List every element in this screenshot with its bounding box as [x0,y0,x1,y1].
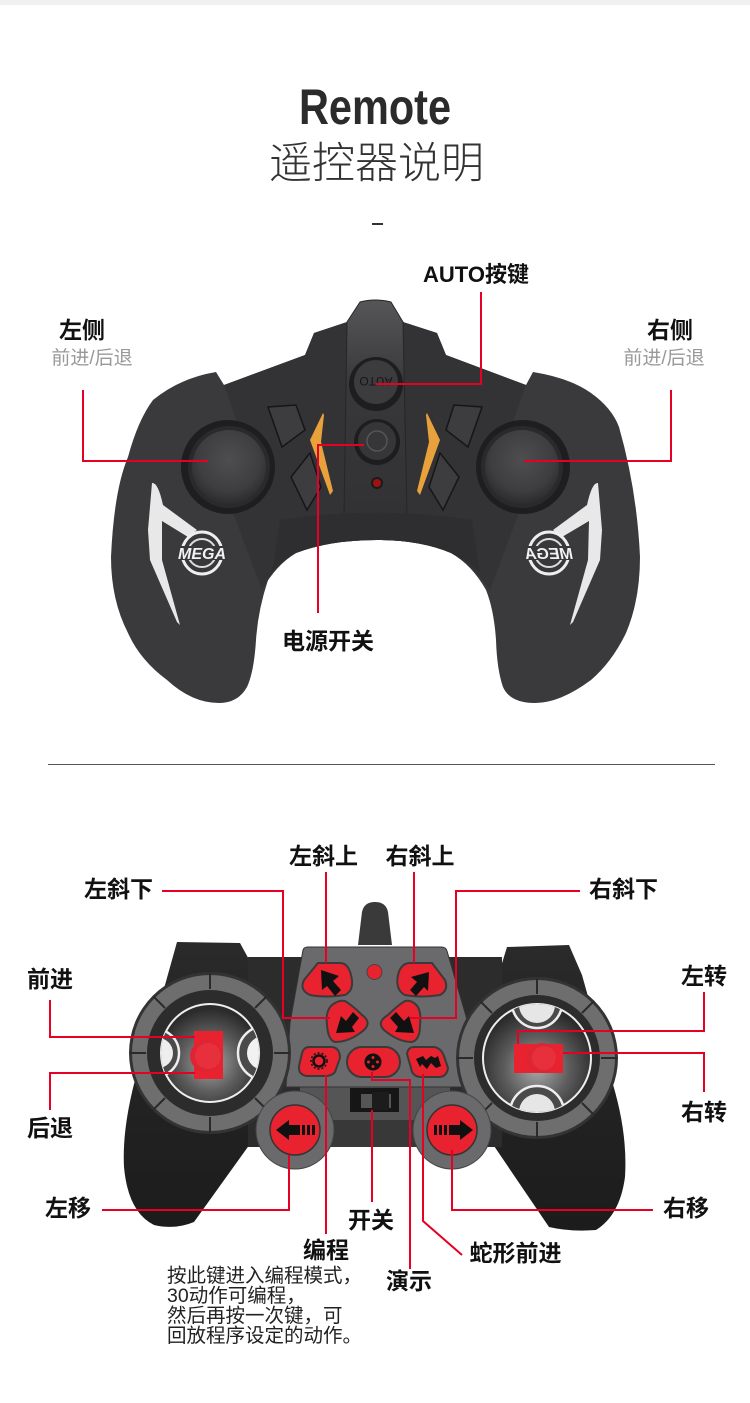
power button [354,419,400,465]
callout: turn right: 右转 [681,1099,727,1125]
callout: switch: 开关 [348,1207,394,1233]
button: snake [407,1047,448,1077]
callout: down-right diagonal: 右斜下 [589,876,658,902]
callout: right stick [524,317,705,461]
callout: backward: 后退 [27,1115,73,1141]
callout: move right: 右移 [663,1195,709,1221]
callout: left stick [51,317,208,461]
lower remote controller [124,902,625,1231]
callout: snake forward [423,1074,562,1266]
programming description [167,1265,362,1347]
callout: demo [372,1072,432,1294]
callout: down-right diagonal [410,876,658,1018]
title [269,79,484,225]
programming description: 按此键进入编程模式， [167,1265,362,1287]
antenna [358,902,392,945]
LED [367,964,382,980]
LED [372,478,382,488]
callout: backward [27,1073,195,1141]
left joystick [181,420,275,514]
callout: demo: 演示 [386,1268,432,1294]
labels and leader lines [27,843,727,1294]
callout: up-left diagonal [289,843,358,963]
callout: move left [45,1155,289,1221]
left red stick [190,1031,223,1079]
MEGA logo left: MEGA [178,546,226,563]
programming description: 30动作可编程， [167,1285,306,1307]
callout: snake forward: 蛇形前进 [470,1240,562,1266]
callout: right stick: 右侧 [647,317,693,343]
grip pads [268,405,482,510]
centre bar [248,957,502,1147]
callout: power switch [282,445,374,654]
centre panel [286,947,468,1087]
right red stick [514,1043,563,1073]
left white trim [148,483,197,625]
callout: programming: 编程 [303,1237,349,1263]
title: Remote [299,79,451,135]
callout: forward: 前进 [27,966,73,992]
callout: turn left: 左转 [681,963,727,989]
callout: left stick: 前进/后退 [51,347,133,369]
button: up-left [302,963,352,996]
MEGA logo right: MEGA [525,546,573,563]
right joystick [476,420,570,514]
MEGA logo left [178,532,227,574]
callout: right stick: 前进/后退 [623,347,705,369]
title: 遥控器说明 [269,129,484,191]
right ring [456,977,618,1140]
button: up-right [397,963,446,996]
AUTO button: AUTO [359,374,393,388]
top remote controller [111,300,640,703]
callout: up-right diagonal [386,843,454,963]
button: demo [347,1047,400,1077]
right white trim [553,483,602,625]
callout: forward [27,966,195,1037]
AUTO button [349,357,403,411]
callout: down-left diagonal: 左斜下 [84,876,153,902]
programming description: 回放程序设定的动作。 [167,1325,362,1347]
callout: move right [452,1150,709,1221]
callout: switch [348,1110,394,1233]
callout: up-right diagonal: 右斜上 [386,843,454,869]
callout: power switch: 电源开关 [282,628,374,654]
left and right orange chevrons [310,413,440,495]
left ring [129,972,292,1134]
callout: left stick: 左侧 [59,317,105,343]
button: down-right [381,1001,420,1042]
left round button [256,1091,334,1169]
right grip [460,945,625,1231]
right round button [413,1091,491,1169]
callout: move left: 左移 [45,1195,91,1221]
callout: down-left diagonal [84,876,330,1018]
callout: AUTO key: AUTO按键 [423,262,529,287]
left grip [124,942,290,1227]
button: gear [299,1047,340,1076]
callout: turn left [518,963,727,1044]
callout: up-left diagonal: 左斜上 [289,843,358,869]
callout: AUTO key [376,262,529,384]
slide switch [350,1088,399,1112]
programming description: 然后再按一次键，可 [167,1305,343,1327]
button: down-left [327,1001,368,1042]
callout: turn right [563,1053,727,1125]
divider [48,764,715,765]
MEGA logo right [525,532,574,574]
